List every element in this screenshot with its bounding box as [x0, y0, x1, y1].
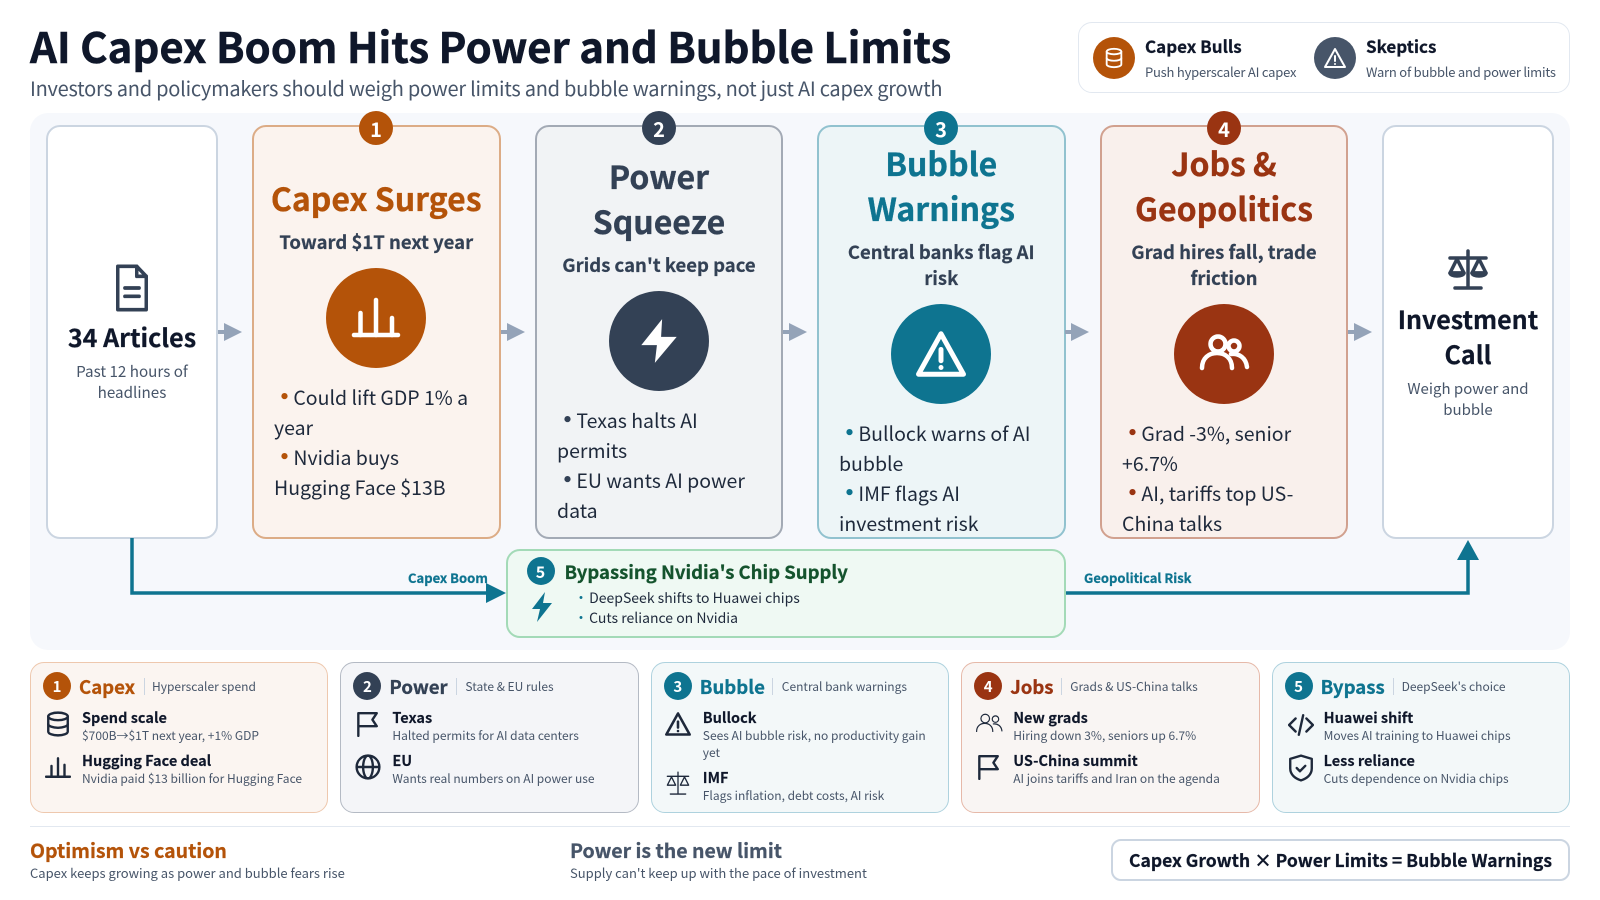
legend label: capex bulls: Capex Bulls: [1145, 33, 1242, 58]
heading: Call: [1445, 336, 1491, 372]
title: AI Capex Boom Hits Power and Bubble Limits: [30, 15, 951, 76]
card: power squeeze: [535, 125, 783, 539]
bullets: • DeepSeek shifts to Huawei chips: [574, 588, 800, 608]
bullets: •: [272, 437, 296, 472]
text: bubble: [1443, 398, 1493, 420]
heading: Bubble: [700, 673, 765, 700]
badge: [353, 672, 381, 700]
item: Bullock: [703, 707, 757, 728]
heading: [1135, 140, 1313, 231]
card: capex surges: [252, 125, 500, 539]
badge: [974, 672, 1002, 700]
takeaway: optimism vs caution: [30, 835, 345, 882]
heading: Bypass: [1321, 673, 1385, 700]
icon: code: [1288, 714, 1314, 736]
heading: Warnings: [868, 185, 1015, 231]
text: headlines: [98, 380, 166, 402]
badge 5: 5: [536, 559, 545, 583]
heading: Optimism vs caution: [30, 835, 227, 864]
summary card: bubble: yet: [703, 744, 720, 761]
bullets: EU wants AI power: [576, 465, 745, 494]
badge: [664, 672, 692, 700]
connector label: geopolitical risk: Geopolitical Risk: [1084, 568, 1192, 587]
summary card: bubble: Sees AI bubble risk, no productivity gain: [703, 727, 926, 744]
summary card: jobs: AI joins tariffs and Iran on the agenda: [1013, 770, 1220, 787]
bullets: data: [557, 495, 598, 524]
icon: document: [116, 264, 148, 312]
bullets: +6.7%: [1122, 448, 1178, 477]
badge 2: [642, 111, 676, 145]
bullets: •: [556, 460, 580, 495]
heading: [593, 153, 725, 244]
note: Hyperscaler spend: [152, 678, 256, 695]
bullets: •: [1120, 473, 1144, 508]
subheading: [1131, 239, 1317, 291]
arrow: [218, 323, 242, 341]
bullets: • Cuts reliance on Nvidia: [574, 608, 738, 628]
badge 5: [526, 557, 554, 585]
heading: Power: [389, 673, 448, 700]
heading: Capex: [79, 673, 135, 700]
text: [1407, 378, 1529, 420]
heading: Jobs: [1010, 673, 1053, 700]
heading: Power: [609, 153, 709, 199]
bullets: •: [838, 413, 862, 448]
connector label: capex boom: Capex Boom: [408, 568, 488, 587]
note: DeepSeek's choice: [1402, 678, 1506, 695]
badge 1: [359, 111, 393, 145]
summary card: power: [340, 662, 639, 813]
panel: main flow: [30, 113, 1570, 650]
bullets: [574, 588, 800, 628]
subheading: Toward $1T next year: [279, 229, 473, 255]
heading: Bubble: [885, 140, 997, 186]
icon: bars: [45, 757, 71, 778]
legend note: capex bulls: Push hyperscaler AI capex: [1145, 62, 1296, 81]
summary card: jobs: [961, 662, 1260, 813]
bullets: •: [1120, 413, 1144, 448]
icon: bolt: [532, 592, 552, 622]
bullets: •: [838, 473, 862, 508]
text: [76, 360, 188, 402]
icon: lightning bolt: [609, 291, 709, 391]
heading: Capex Surges: [271, 175, 482, 221]
card: jobs and geopolitics: [1100, 125, 1348, 539]
summary card: power: Halted permits for AI data centers: [392, 727, 579, 744]
bullets: AI, tariffs top US-: [1141, 478, 1293, 507]
icon: shield: [1289, 754, 1313, 782]
formula callout: [1111, 839, 1570, 881]
legend icon: skeptics: [1314, 37, 1356, 79]
heading: Investment: [1398, 301, 1538, 337]
text: Capex keeps growing as power and bubble fears rise: [30, 863, 345, 882]
arrow: [501, 323, 525, 341]
bullets: •: [272, 377, 296, 412]
arrow: [1065, 323, 1089, 341]
arrow: [783, 323, 807, 341]
icon: warning: [665, 712, 691, 736]
badge 3: 3: [935, 114, 947, 142]
legend icon: capex bulls: [1093, 37, 1135, 79]
bullets: China talks: [1122, 508, 1222, 537]
item: US-China summit: [1013, 750, 1138, 771]
bullets: •: [556, 400, 580, 435]
icon: scale: [666, 772, 690, 795]
item: EU: [392, 750, 412, 771]
panel: bypass: [506, 549, 1066, 638]
subheading: Central banks flag AI: [848, 239, 1035, 265]
legend: actors: [1078, 22, 1570, 93]
item: New grads: [1013, 707, 1088, 728]
badge 4: [1207, 111, 1241, 145]
badge: 3: [673, 676, 682, 696]
bullets: Texas halts AI: [576, 405, 698, 434]
badge: 2: [363, 676, 372, 696]
badge: 4: [984, 676, 993, 696]
summary card: bypass: [1272, 662, 1570, 813]
card: bubble warnings: [817, 125, 1066, 539]
subheading: [848, 239, 1035, 291]
bullets: investment risk: [839, 508, 978, 537]
subheading: Grids can't keep pace: [562, 252, 756, 278]
formula callout: Capex Growth × Power Limits = Bubble Warnings: [1129, 848, 1552, 873]
badge: 5: [1294, 676, 1303, 696]
legend label: skeptics: Skeptics: [1366, 33, 1436, 58]
badge 4: 4: [1218, 114, 1230, 142]
bullets: [556, 400, 745, 524]
subheading: risk: [924, 265, 958, 291]
bullets: Bullock warns of AI: [858, 418, 1030, 447]
subheading: friction: [1191, 265, 1257, 291]
badge: [43, 672, 71, 700]
summary card: capex: [30, 662, 328, 813]
heading: Jobs &: [1171, 140, 1277, 186]
icon: database: [47, 711, 69, 737]
item: IMF: [703, 767, 728, 788]
text: Weigh power and: [1407, 378, 1529, 399]
bullets: year: [274, 412, 313, 441]
summary card: bubble: [651, 662, 949, 813]
takeaway: power is the new limit: [570, 835, 867, 882]
badge 3: [924, 111, 958, 145]
item: Spend scale: [82, 707, 167, 728]
icon: globe: [355, 754, 381, 780]
bullets: bubble: [839, 448, 903, 477]
bullets: permits: [557, 435, 627, 464]
heading: Bypassing Nvidia's Chip Supply: [564, 559, 848, 585]
note: Central bank warnings: [782, 678, 907, 695]
summary card: bubble: Flags inflation, debt costs, AI risk: [703, 787, 884, 804]
bullets: IMF flags AI: [858, 478, 960, 507]
heading: Squeeze: [593, 198, 725, 244]
connector: capex boom: [130, 538, 506, 603]
icon: flag: [978, 755, 999, 780]
note: State & EU rules: [465, 678, 554, 695]
bullets: Nvidia buys: [293, 442, 399, 471]
bullets: Could lift GDP 1% a: [293, 382, 468, 411]
arrow: [1348, 323, 1372, 341]
text: Supply can't keep up with the pace of investment: [570, 863, 867, 882]
bullets: Grad -3%, senior: [1141, 418, 1291, 447]
summary card: capex: Nvidia paid $13 billion for Hugging Face: [82, 770, 302, 787]
note: Grads & US-China talks: [1070, 678, 1198, 695]
card: 34 articles: [46, 125, 218, 539]
badge 2: 2: [653, 114, 665, 142]
bullets: [272, 377, 468, 501]
icon: people: [1174, 304, 1274, 404]
badge 1: 1: [370, 114, 382, 142]
icon: scale: [1448, 249, 1488, 290]
icon: bar chart: [326, 268, 426, 368]
summary card: capex: $700B→$1T next year, +1% GDP: [82, 727, 259, 744]
badge: 1: [53, 676, 61, 696]
summary card: jobs: Hiring down 3%, seniors up 6.7%: [1013, 727, 1196, 744]
item: Less reliance: [1324, 750, 1415, 771]
legend note: skeptics: Warn of bubble and power limits: [1366, 62, 1556, 81]
bullets: [1120, 413, 1293, 537]
subheading: Grad hires fall, trade: [1131, 239, 1317, 265]
heading: Geopolitics: [1135, 185, 1313, 231]
heading: 34 Articles: [68, 319, 196, 355]
icon: warning triangle: [891, 304, 991, 404]
icon: people: [976, 714, 1002, 732]
item: Hugging Face deal: [82, 750, 211, 771]
icon: flag: [357, 712, 378, 737]
summary card: power: Wants real numbers on AI power use: [392, 770, 595, 787]
bullets: Hugging Face $13B: [274, 472, 446, 501]
badge: [1285, 672, 1313, 700]
item: Huawei shift: [1324, 707, 1413, 728]
subtitle: Investors and policymakers should weigh power limits and bubble warnings, not just AI capex growth: [30, 73, 942, 102]
card: investment call: [1382, 125, 1554, 539]
summary card: bypass: Cuts dependence on Nvidia chips: [1324, 770, 1509, 787]
connector: geopolitical risk: [1066, 540, 1479, 595]
item: Texas: [392, 707, 432, 728]
bullets: [838, 413, 1030, 537]
text: Past 12 hours of: [76, 360, 188, 382]
summary card: bypass: Moves AI training to Huawei chips: [1324, 727, 1511, 744]
heading: Power is the new limit: [570, 835, 782, 864]
heading: [1398, 301, 1538, 372]
heading: [868, 140, 1015, 231]
